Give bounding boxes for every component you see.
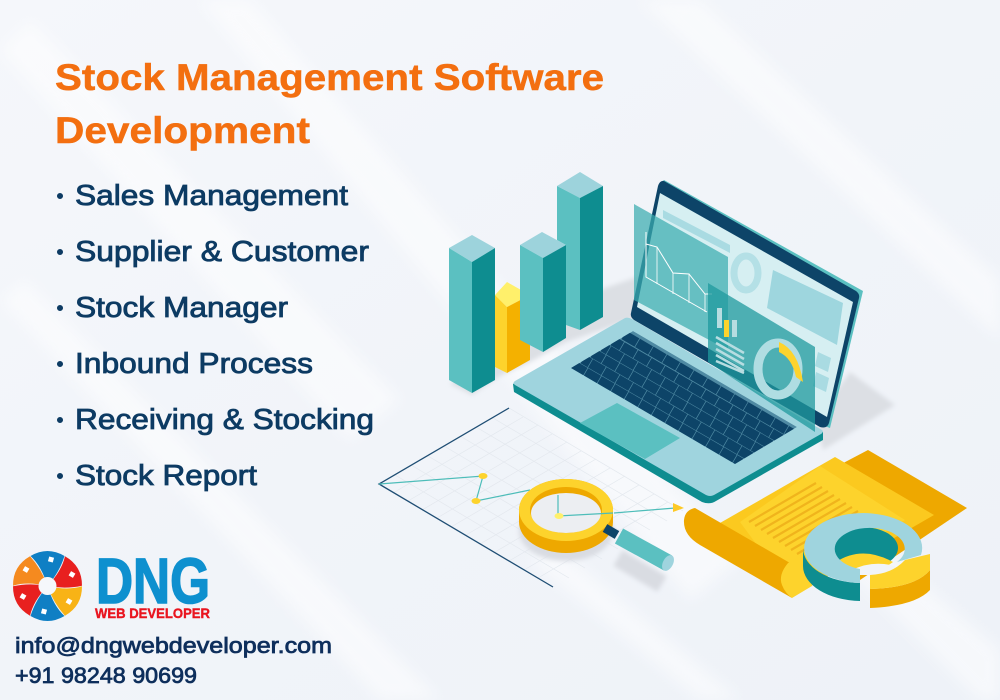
title: Development [55, 110, 310, 151]
floating chart panel [634, 204, 728, 350]
analysis grid sheet [379, 408, 683, 587]
email: info@dngwebdeveloper.com [15, 633, 332, 658]
logo mark [9, 551, 86, 621]
report document [684, 450, 967, 598]
list item: Supplier & Customer: Supplier & Customer [75, 236, 369, 268]
list item: Receiving & Stocking: Receiving & Stocking [75, 404, 374, 436]
chart line and points [379, 473, 530, 504]
isometric bar chart [449, 172, 603, 393]
phone: +91 98248 90699 [15, 663, 197, 688]
trend arrow [614, 503, 684, 513]
magnifier handle [605, 528, 676, 573]
list item: Inbound Process: Inbound Process [75, 348, 313, 380]
desk shadows [450, 276, 895, 450]
title: Stock Management Software [55, 57, 604, 98]
3D ring chart [803, 513, 930, 608]
list item: Sales Management: Sales Management [75, 180, 348, 212]
mini donut chart [758, 342, 803, 395]
logo wordmark: WEB DEVELOPER [95, 605, 210, 621]
title [55, 57, 604, 151]
laptop screen frame [631, 180, 863, 428]
bar 1 [449, 235, 495, 393]
bar 3 [520, 232, 566, 352]
bar 4 [557, 172, 603, 330]
contact details [15, 633, 332, 688]
trackpad [580, 403, 680, 459]
floating donut panel [708, 283, 815, 432]
list item: Stock Manager: Stock Manager [75, 292, 288, 324]
company logo [9, 545, 210, 621]
keyboard [571, 331, 800, 468]
chart axes [379, 408, 553, 587]
bar 2 yellow [495, 282, 530, 373]
list item: Stock Report: Stock Report [75, 460, 257, 492]
laptop base [513, 318, 823, 503]
magnifying glass [519, 479, 676, 584]
feature list [57, 180, 374, 492]
laptop [513, 180, 863, 503]
logo wordmark: DNG [96, 545, 210, 617]
ring yellow segment [870, 554, 930, 608]
